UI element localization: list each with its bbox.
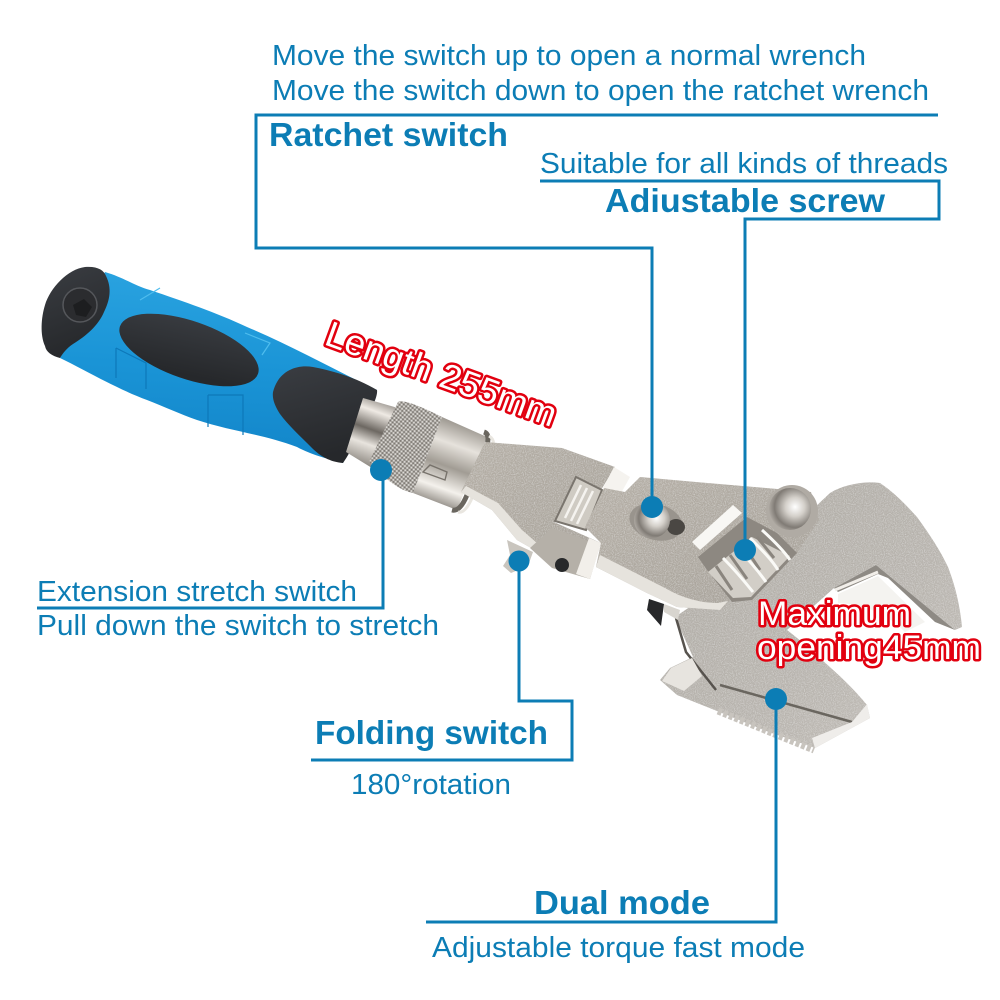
connector: adjustable screw xyxy=(540,181,939,561)
heading: folding switch: Folding switch xyxy=(315,714,548,751)
connector: dual mode xyxy=(426,688,787,922)
heading: adjustable screw: Adiustable screw xyxy=(605,182,885,219)
connector: extension stretch switch xyxy=(37,459,392,608)
text: extension stretch switch xyxy=(37,576,439,642)
folding joint neck xyxy=(461,442,630,579)
ratchet knob xyxy=(625,498,687,546)
callout: maximum opening xyxy=(757,595,981,667)
handle xyxy=(42,267,377,463)
adjusting screw window xyxy=(692,505,797,602)
callout: maximum opening: Maximum xyxy=(758,595,911,633)
text: suitable for threads: Suitable for all kinds of threads xyxy=(540,148,948,180)
text: rotation: 180°rotation xyxy=(351,769,511,801)
connector: ratchet switch xyxy=(256,115,938,518)
text: switch instructions: Move the switch up to open a normal wrench xyxy=(272,40,866,72)
connector: folding switch xyxy=(311,550,572,760)
text: switch instructions: Move the switch down to open the ratchet wrench xyxy=(272,75,929,107)
callout: length: Length 255mm xyxy=(320,313,563,435)
adjusting screw spring xyxy=(716,530,790,592)
head plate xyxy=(585,477,819,626)
extension collar xyxy=(346,398,493,512)
callout: maximum opening: opening45mm xyxy=(757,629,981,667)
heading: dual mode: Dual mode xyxy=(534,884,710,921)
text: torque fast mode: Adjustable torque fast mode xyxy=(432,932,805,964)
jaw bar and jaws xyxy=(660,482,962,750)
wrench illustration xyxy=(42,267,962,750)
text: extension stretch switch: Pull down the switch to stretch xyxy=(37,610,439,642)
text: switch instructions xyxy=(272,40,929,107)
text: extension stretch switch: Extension stretch switch xyxy=(37,576,357,608)
ball pivot xyxy=(766,485,818,537)
heading: ratchet switch: Ratchet switch xyxy=(269,116,508,153)
